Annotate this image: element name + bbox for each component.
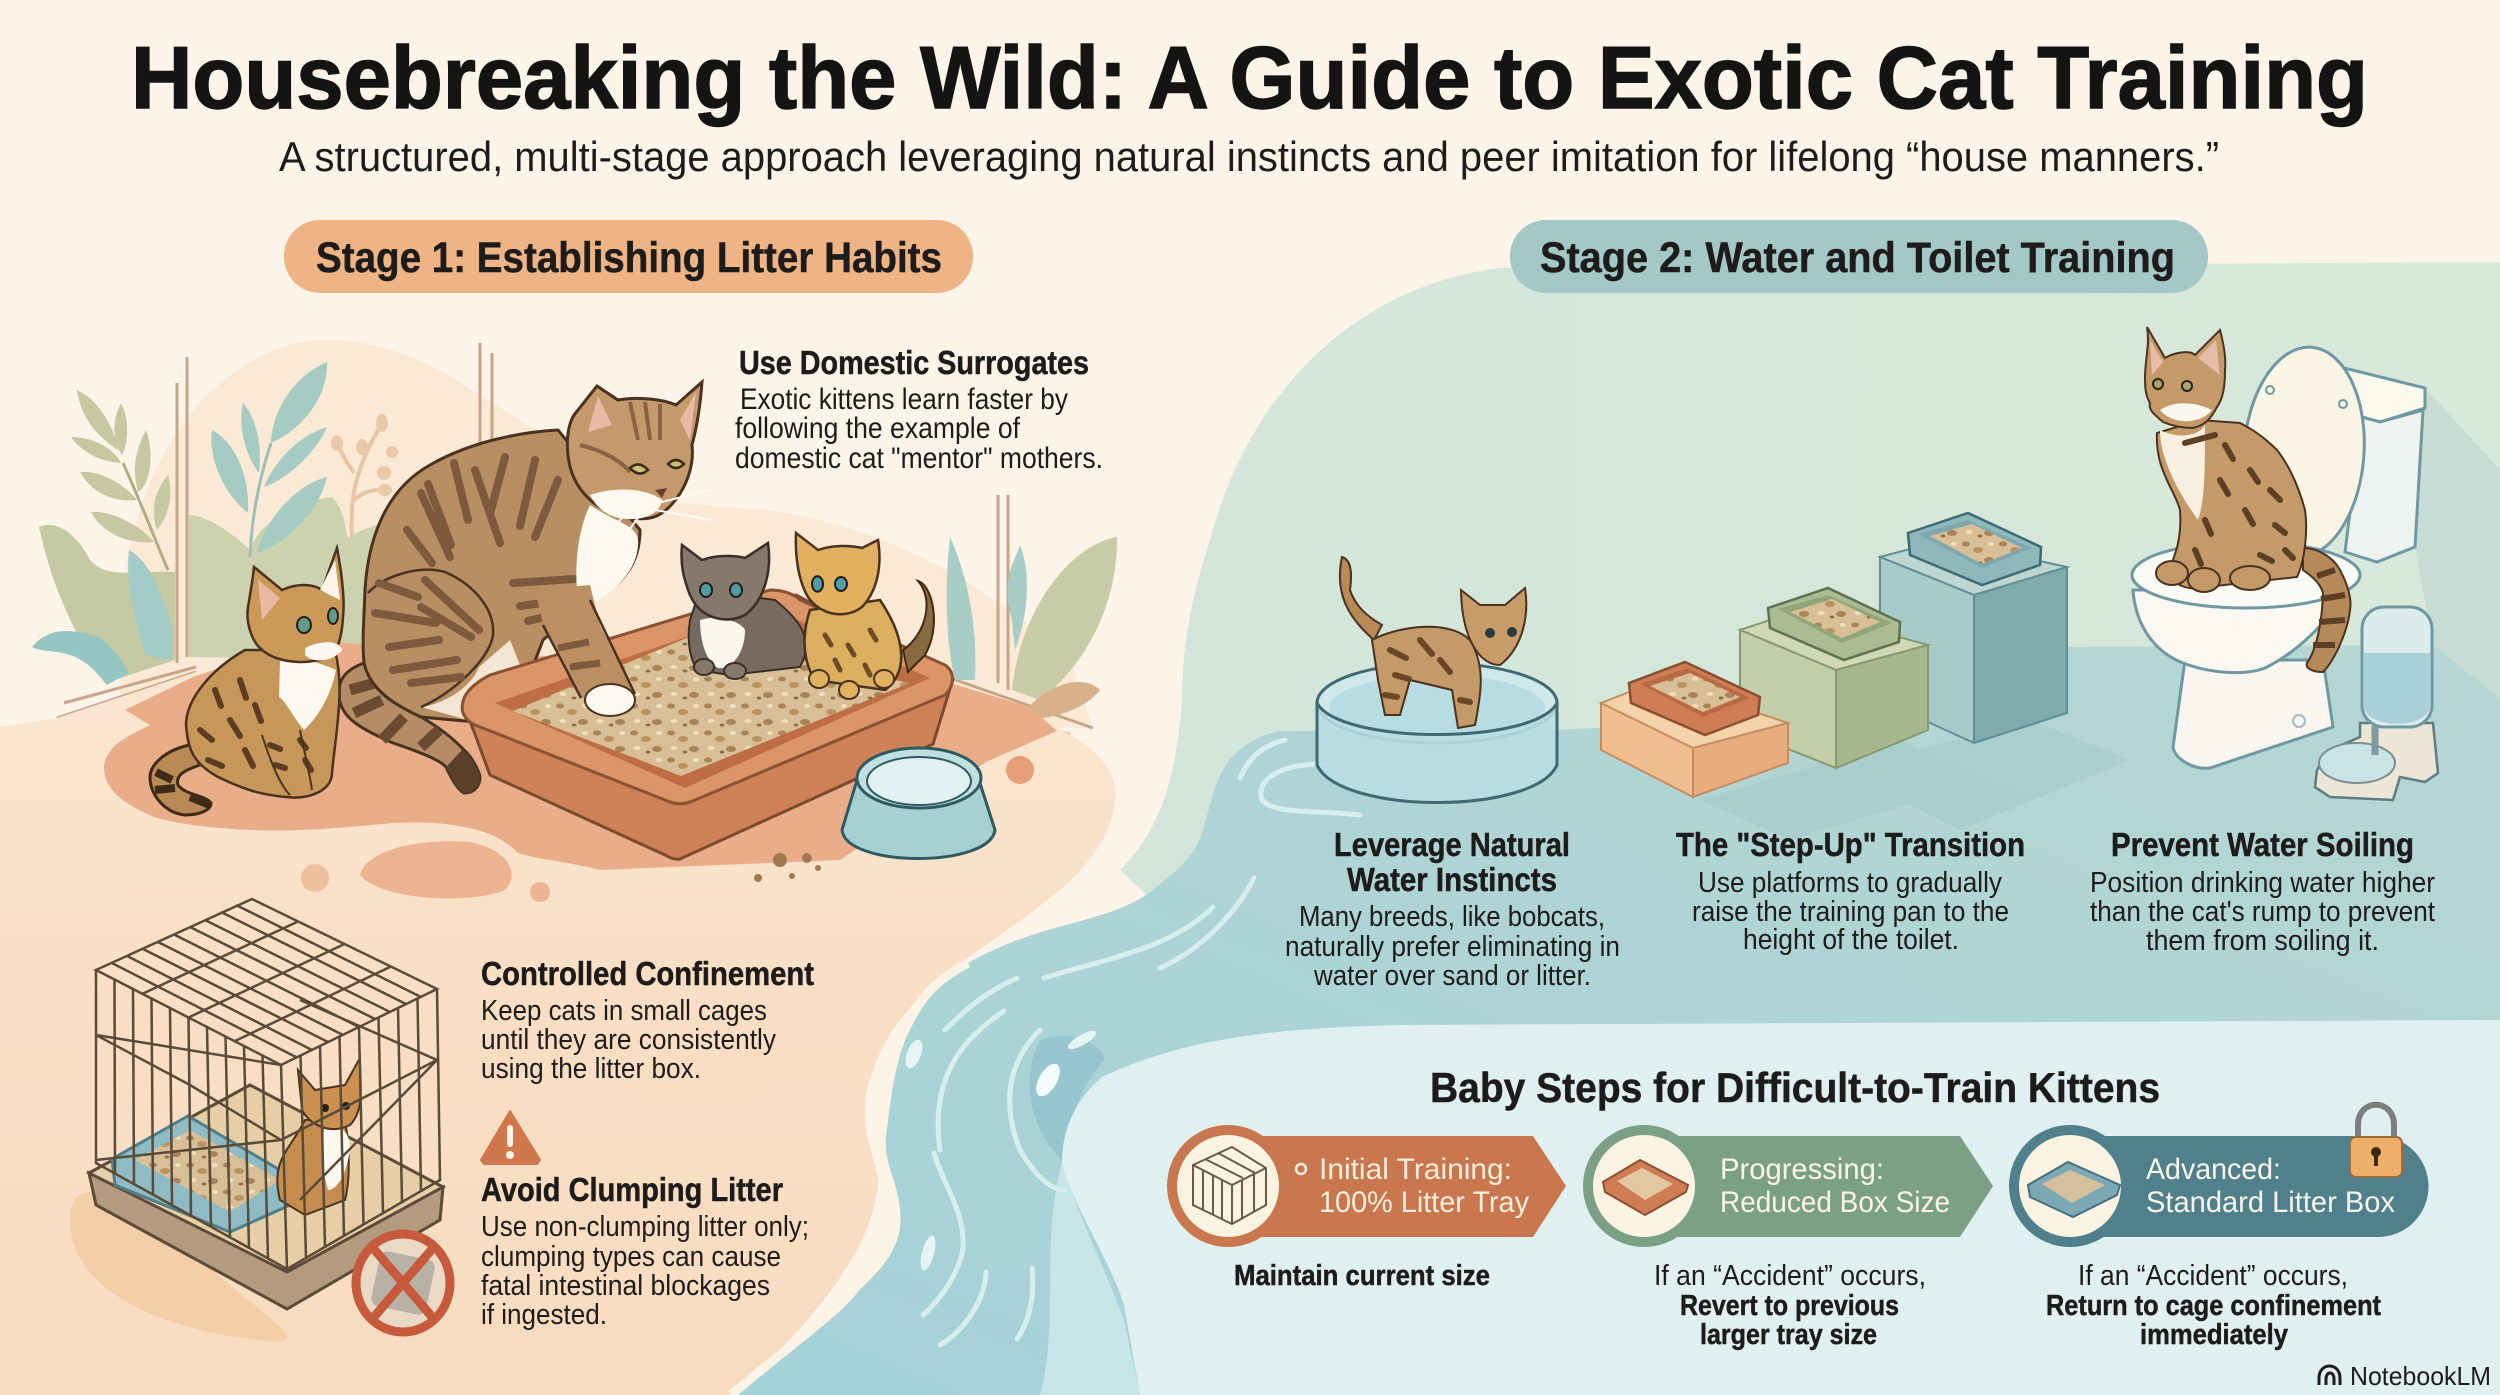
tray 3 [1908, 513, 2041, 585]
centre sage leaves [189, 497, 380, 660]
text: step-up transition: height of the toilet. [1743, 924, 1959, 956]
text: leverage natural water instincts: water over sand or litter. [1313, 960, 1591, 992]
panel: stage 1 wall backdrop [57, 340, 1093, 735]
kitten leg lines [262, 730, 312, 795]
big sage leaf [39, 525, 175, 683]
kitten ear [258, 580, 280, 620]
kitten body [186, 650, 340, 798]
yellow paws [809, 670, 894, 699]
litter [513, 637, 910, 776]
text: leverage natural water instincts [1285, 826, 1620, 992]
basin back [1317, 663, 1557, 743]
cat body [363, 430, 640, 722]
bobcat tail [2303, 548, 2351, 672]
text: controlled confinement: using the litter box. [481, 1053, 701, 1085]
caption: step 3: Return to cage confinement [2046, 1290, 2381, 1322]
box outer [463, 595, 953, 859]
subtitle: A structured, multi-stage approach leveraging natural instincts and peer imitation for lifelong “house manners.” [279, 133, 2219, 180]
cage tray [89, 1173, 443, 1309]
text: prevent water soiling: than the cat's rump to prevent [2090, 896, 2435, 928]
tail bands [2313, 570, 2345, 645]
tail bands [350, 683, 439, 747]
caption: step 1: Maintain current size [1234, 1260, 1490, 1292]
yellow head [796, 533, 879, 614]
bobcat head [2145, 327, 2225, 428]
basin front [1317, 703, 1557, 802]
toilet tank top [2340, 367, 2425, 422]
text: prevent water soiling: Prevent Water Soiling [2111, 826, 2414, 863]
caption: step 2 [1654, 1260, 1926, 1351]
teal branch leaves [211, 362, 327, 553]
caged kitten [277, 1120, 349, 1215]
tray 1 [1629, 662, 1760, 735]
lid hinges [2266, 386, 2274, 394]
text: use domestic surrogates: following the example of [735, 412, 1021, 445]
sage branch [123, 463, 168, 570]
text: leverage natural water instincts: Water Instincts [1347, 861, 1557, 898]
caption: step 2: If an “Accident” occurs, [1654, 1260, 1926, 1292]
text: use domestic surrogates [735, 344, 1103, 475]
heading: stage 1 [284, 220, 973, 293]
box inside [495, 608, 930, 788]
text: use domestic surrogates: domestic cat "mentor" mothers. [735, 442, 1103, 475]
text: controlled confinement: until they are consistently [481, 1024, 776, 1056]
icon: orange tray [1603, 1160, 1688, 1215]
yellow spots [825, 630, 876, 675]
illustration: paw [585, 684, 635, 716]
illustration: kitten in water basin [1317, 557, 1557, 802]
illustration: right plants [947, 537, 1117, 720]
step 1: initial training arrow: 100% Litter Tray [1319, 1186, 1529, 1219]
river highlights [923, 740, 1360, 1345]
cat eyes [630, 460, 684, 474]
cat head [567, 382, 702, 519]
text: avoid clumping litter: clumping types can cause [481, 1241, 781, 1273]
heading: stage 1: Stage 1: Establishing Litter Habits [316, 234, 942, 282]
caption: step 3: If an “Accident” occurs, [2078, 1260, 2348, 1292]
kitten chest [279, 659, 336, 730]
text: leverage natural water instincts: naturally prefer eliminating in [1285, 931, 1620, 963]
tray 2 [1768, 588, 1900, 660]
illustration: bobcat on toilet [2132, 327, 2425, 768]
panel: stage 2 wall shadow [2415, 388, 2500, 698]
illustration: step-up blocks [1601, 513, 2067, 797]
tail tip [446, 750, 480, 793]
heading: baby steps: Baby Steps for Difficult-to-Train Kittens [1430, 1064, 2160, 1111]
cat stripes [375, 457, 581, 683]
teal branch [250, 443, 271, 557]
cat tail [339, 663, 480, 793]
toilet seat [2132, 542, 2360, 608]
text: avoid clumping litter: if ingested. [481, 1299, 607, 1331]
kitten tail [1340, 557, 1382, 640]
heading: stage 2: Stage 2: Water and Toilet Training [1540, 234, 2175, 282]
kitten muzzle [305, 642, 342, 660]
step 1: initial training arrow [1167, 1125, 1566, 1247]
illustration: left kitten [150, 548, 344, 815]
illustration: grey kitten [681, 543, 806, 679]
kitten ear right [320, 560, 340, 600]
title: Housebreaking the Wild: A Guide to Exotic Cat Training [131, 28, 2368, 127]
block 3 [1880, 540, 2067, 595]
text: use domestic surrogates: Use Domestic Surrogates [739, 344, 1089, 381]
cat whiskers [590, 490, 712, 570]
bobcat eyes [2153, 379, 2163, 389]
belly [421, 640, 530, 722]
block 1 [1601, 680, 1788, 748]
icon: bullet [1296, 1164, 1306, 1174]
cat ears inner [588, 392, 696, 440]
heading: stage 2 [1510, 220, 2208, 293]
decoration: floor puddles [301, 756, 1034, 902]
haunch [368, 570, 493, 707]
caption: step 2: larger tray size [1700, 1319, 1877, 1351]
text: leverage natural water instincts: Leverage Natural [1334, 826, 1570, 863]
yellow body [805, 600, 901, 690]
illustration: litter box [462, 590, 953, 859]
lighter river band [1040, 1163, 1140, 1395]
bobcat body [2157, 420, 2306, 588]
kitten eyes [297, 608, 338, 633]
bobcat ears inner [2150, 340, 2220, 375]
icon: blue tray [2028, 1162, 2120, 1217]
text: step-up transition: The "Step-Up" Transition [1676, 826, 2025, 863]
illustration: yellow kitten [796, 533, 934, 699]
basin water surface [1329, 675, 1545, 741]
icon: no clumping litter sign [353, 1231, 453, 1335]
toilet pedestal [2173, 660, 2333, 768]
cat white chest [576, 505, 638, 612]
toilet lid [2237, 343, 2371, 561]
cat face markings [580, 402, 660, 472]
kitten head [248, 548, 344, 662]
text: step-up transition: raise the training pan to the [1692, 896, 2009, 928]
pedestal hole [2293, 715, 2305, 727]
panel: stage 2 green wall [1120, 262, 2500, 1040]
box rim [462, 590, 952, 804]
grey paws [694, 659, 746, 679]
berry twig [337, 423, 382, 537]
kitten spots [200, 680, 311, 770]
text: avoid clumping litter: fatal intestinal blockages [481, 1270, 770, 1302]
toilet bowl [2133, 590, 2345, 673]
step 2: progressing arrow [1583, 1125, 1993, 1247]
step 2: progressing arrow: Progressing: [1720, 1153, 1884, 1186]
kitten spots [1385, 640, 1470, 702]
logo: NotebookLM: NotebookLM [2350, 1361, 2491, 1391]
grey body [689, 590, 806, 675]
step 3: advanced bar: Standard Litter Box [2146, 1186, 2395, 1219]
tall teal leaf [128, 550, 172, 660]
cage shadow [70, 1192, 287, 1342]
text: leverage natural water instincts: Many breeds, like bobcats, [1299, 901, 1605, 933]
step 2: progressing arrow: Reduced Box Size [1720, 1186, 1950, 1219]
icon: warning triangle [481, 1111, 540, 1164]
text: prevent water soiling: them from soiling it. [2146, 925, 2379, 957]
cat muzzle [590, 490, 662, 519]
grey head [681, 543, 769, 619]
sage branch leaves [71, 390, 170, 542]
text: avoid clumping litter [481, 1171, 809, 1331]
kitten head [1461, 588, 1526, 665]
text: avoid clumping litter: Avoid Clumping Litter [481, 1171, 783, 1208]
illustration: mother cat front leg over box [535, 585, 635, 698]
kitten tail [150, 745, 211, 815]
low teal leaf [32, 631, 129, 685]
grey eyes [700, 583, 742, 597]
toilet tank [2345, 410, 2423, 562]
lid hinge right [2339, 400, 2347, 408]
illustration: confinement cage [70, 899, 443, 1342]
text: controlled confinement [481, 955, 814, 1085]
panel: stage 1 peach ground [0, 640, 1116, 1395]
bobcat paws [2156, 561, 2270, 592]
text: controlled confinement: Keep cats in small cages [481, 995, 767, 1027]
text: prevent water soiling [2090, 826, 2435, 957]
text: step-up transition: Use platforms to gradually [1698, 867, 2002, 899]
illustration: floor rug under cats [104, 640, 1057, 870]
caption: step 3: immediately [2140, 1319, 2288, 1351]
panel: baby steps background [1062, 1020, 2500, 1395]
bobcat spots [2185, 435, 2293, 564]
block shadows on floor [1700, 720, 2130, 840]
block 2 [1740, 610, 1928, 670]
step 3: advanced bar: Advanced: [2146, 1153, 2281, 1186]
water stream and floor [731, 645, 2500, 1395]
bobcat muzzle [2160, 403, 2212, 421]
illustration: left plants [32, 362, 398, 685]
grey chest [700, 618, 745, 668]
step 3: advanced bar [2009, 1125, 2428, 1247]
text: controlled confinement: Controlled Confinement [481, 955, 814, 992]
caption: step 2: Revert to previous [1680, 1290, 1899, 1322]
illustration: mother cat [339, 382, 712, 793]
cat nose [655, 488, 667, 498]
darker river band [1030, 1036, 1105, 1160]
text: use domestic surrogates: Exotic kittens learn faster by [740, 383, 1068, 416]
berries [331, 414, 398, 496]
text: prevent water soiling: Position drinking water higher [2090, 867, 2435, 899]
blue litter tray [112, 1116, 297, 1232]
text: step-up transition [1676, 826, 2025, 956]
cage wires [96, 899, 440, 1269]
icon: water bowl [842, 748, 995, 858]
icon: mini cage [1193, 1147, 1266, 1224]
yellow tail [903, 581, 934, 672]
text: avoid clumping litter: Use non-clumping litter only; [481, 1211, 809, 1243]
yellow eyes [812, 576, 847, 592]
icon: padlock [2350, 1105, 2402, 1177]
step 1: initial training arrow: Initial Training: [1319, 1153, 1512, 1186]
kitten body [1372, 627, 1481, 728]
caption: step 3 [2046, 1260, 2381, 1351]
bobcat chest [2160, 425, 2205, 520]
icon: water feeder [2315, 607, 2438, 800]
